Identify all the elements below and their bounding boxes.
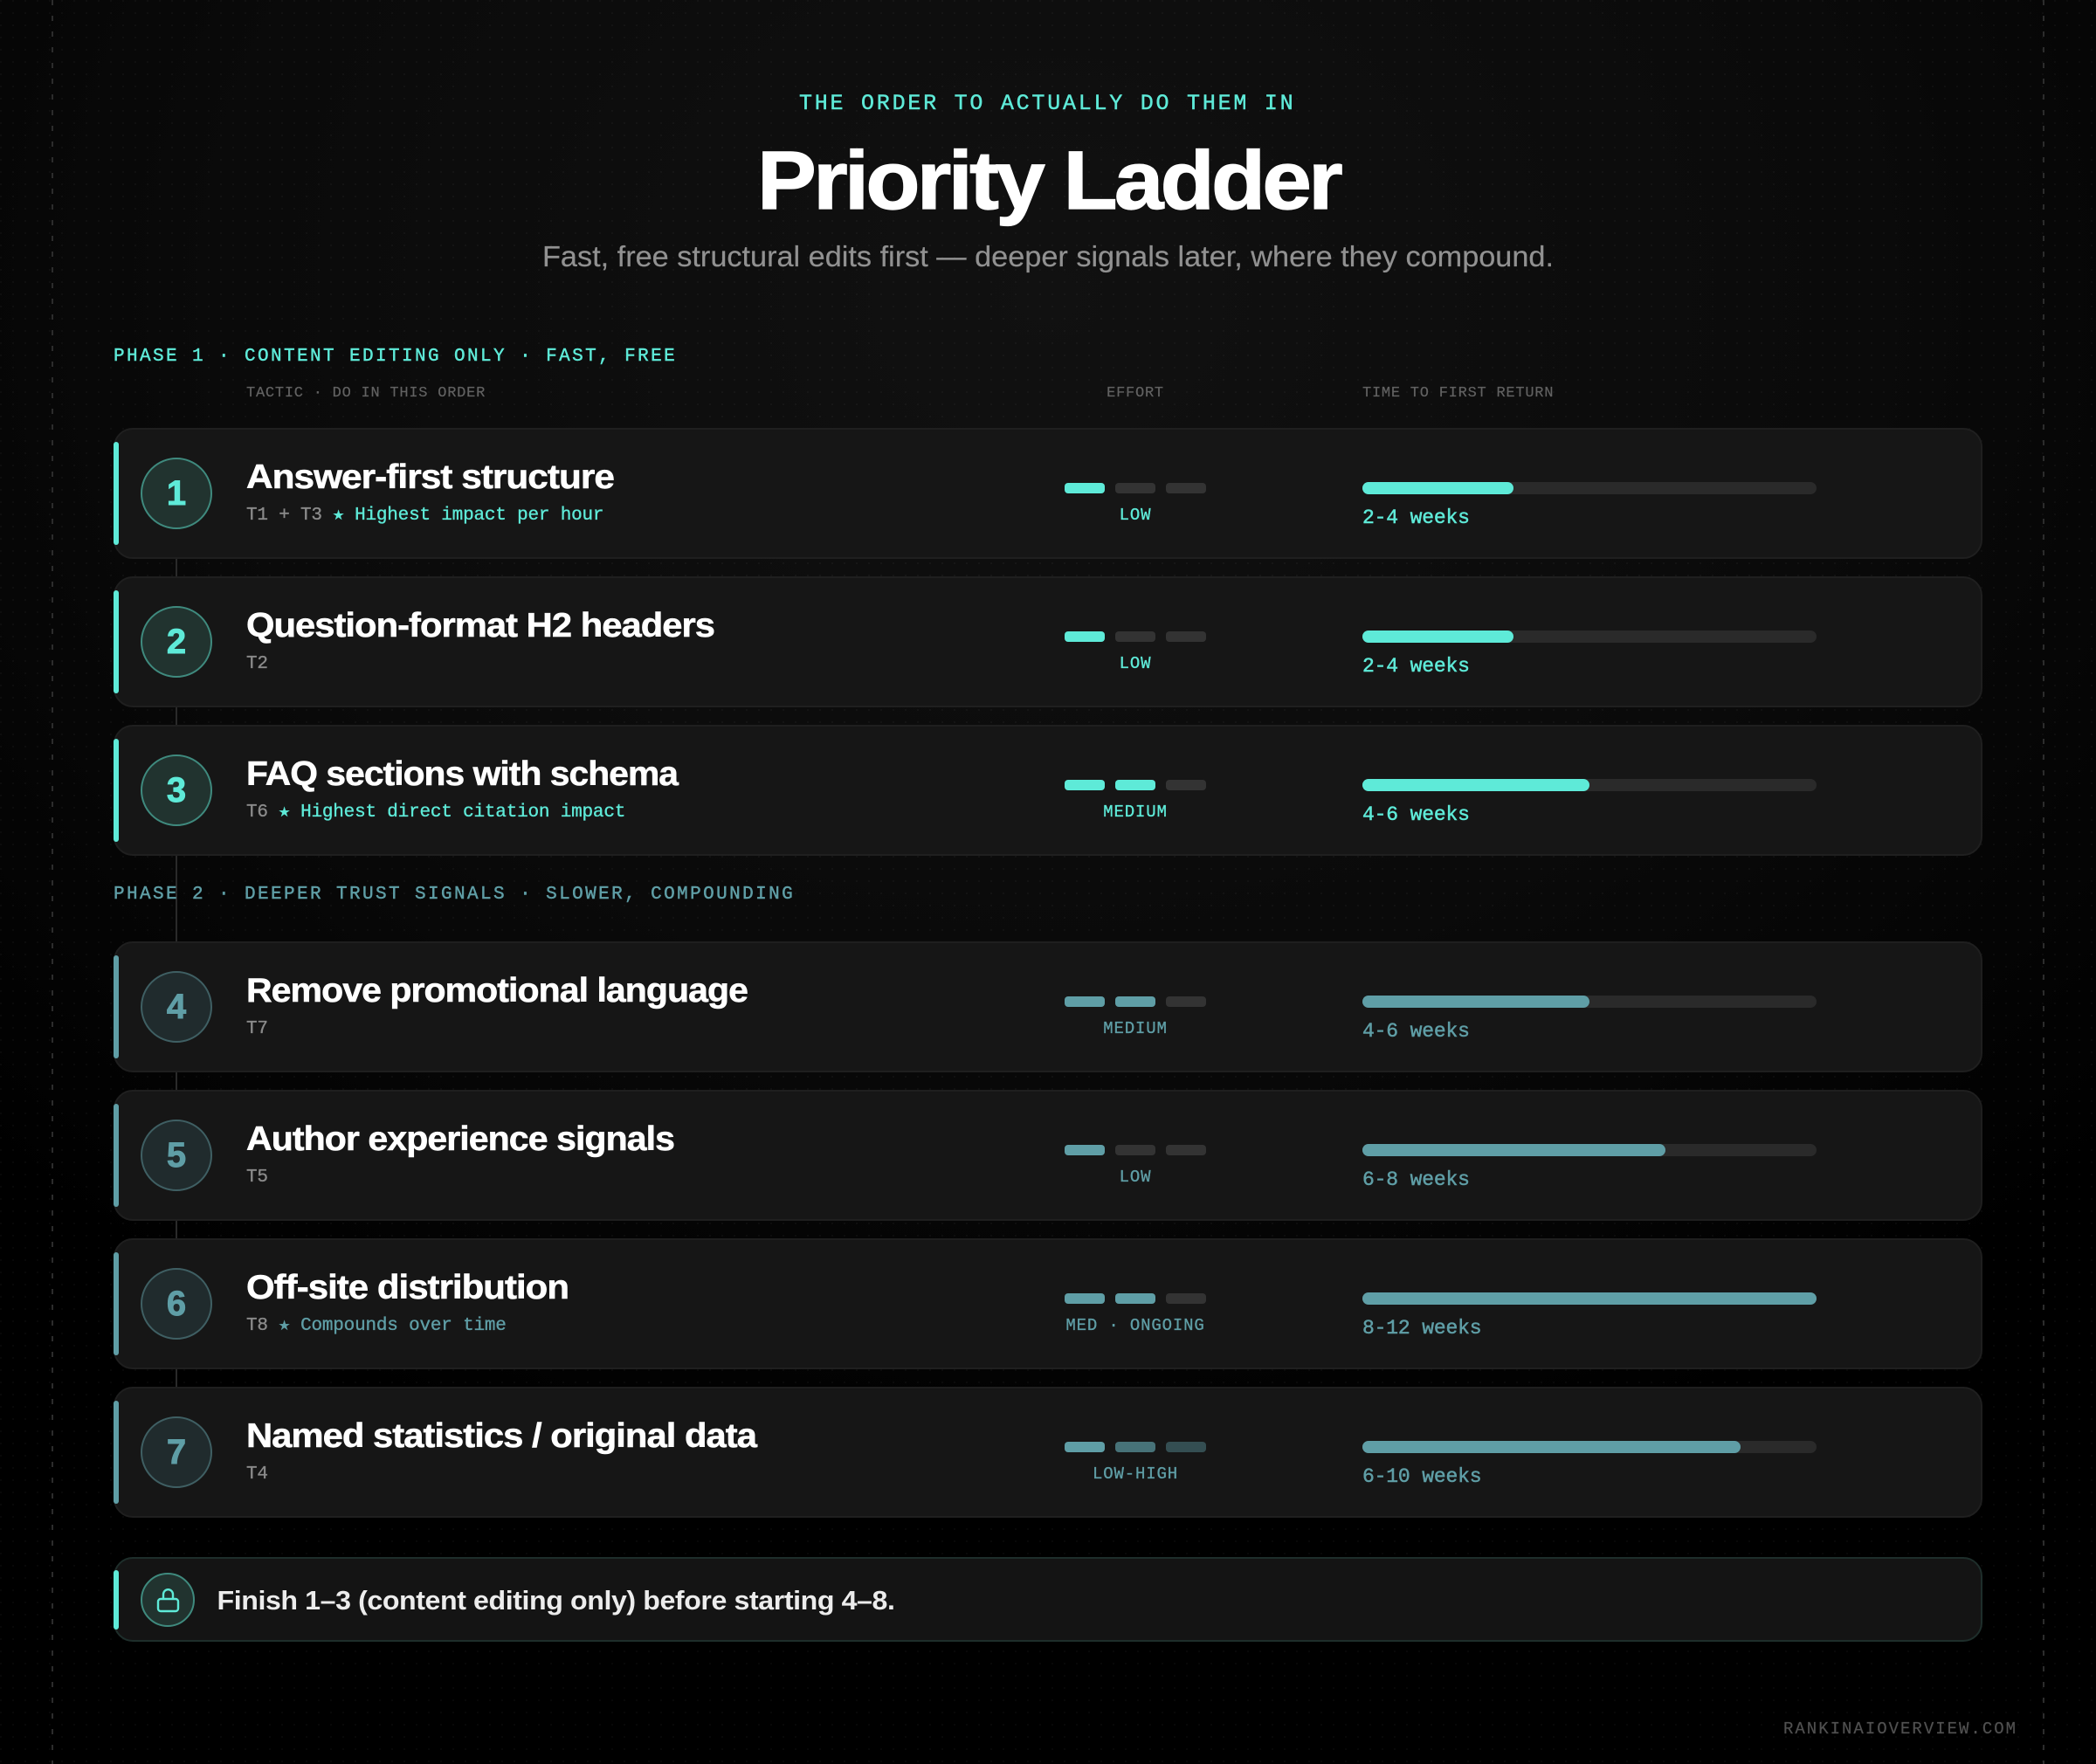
tactic name: Author experience signals (246, 1120, 674, 1158)
tactic note: T5 (246, 1168, 268, 1188)
callout text: Finish 1–3 (content editing only) before starting 4–8. (217, 1585, 894, 1616)
time bar (1362, 1292, 1817, 1340)
number badge 7 (141, 1417, 211, 1487)
time bar: 6-10 weeks (1362, 1465, 1481, 1488)
number badge 1: 1 (167, 474, 186, 513)
time bar (1362, 1441, 1817, 1488)
effort meter: LOW (1120, 1168, 1151, 1187)
ladder connector line (176, 559, 177, 1387)
number badge 6 (141, 1269, 211, 1339)
title: Priority Ladder (757, 134, 1342, 227)
time bar: 4-6 weeks (1362, 1020, 1470, 1043)
row 5: Author experience signals (114, 1091, 1982, 1220)
effort meter (1065, 631, 1206, 673)
time bar: 2-4 weeks (1362, 655, 1470, 678)
tactic note: T2 (246, 654, 268, 674)
tactic note: T7 (246, 1019, 268, 1039)
effort meter (1065, 483, 1206, 525)
column header: time to first return: TIME TO FIRST RETURN (1362, 385, 1554, 402)
row 6: Off-site distribution (114, 1239, 1982, 1368)
row 1: Answer-first structure (114, 429, 1982, 558)
time bar: 6-8 weeks (1362, 1168, 1470, 1191)
eyebrow: THE ORDER TO ACTUALLY DO THEM IN (799, 91, 1295, 116)
number badge 5: 5 (167, 1136, 186, 1175)
number badge 3: 3 (167, 771, 186, 810)
effort meter (1065, 780, 1206, 822)
column header: effort: EFFORT (1107, 385, 1164, 402)
time bar (1362, 1144, 1817, 1191)
number badge 2: 2 (167, 623, 186, 661)
effort meter: LOW-HIGH (1093, 1464, 1178, 1484)
time bar (1362, 996, 1817, 1043)
time bar (1362, 482, 1817, 529)
phase 1 heading: PHASE 1 · CONTENT EDITING ONLY · FAST, FREE (114, 347, 677, 367)
number badge 4 (141, 972, 211, 1042)
callout: finish first (114, 1558, 1982, 1641)
row 7: Named statistics / original data (114, 1388, 1982, 1517)
tactic name: FAQ sections with schema (246, 755, 679, 793)
time bar: 8-12 weeks (1362, 1317, 1481, 1340)
time bar: 2-4 weeks (1362, 506, 1470, 529)
effort meter (1065, 996, 1206, 1038)
effort meter: MEDIUM (1103, 1019, 1168, 1038)
tactic name: Remove promotional language (246, 972, 748, 1009)
row 4: Remove promotional language (114, 942, 1982, 1071)
number badge 3 (141, 755, 211, 825)
time bar (1362, 630, 1817, 678)
number badge 5 (141, 1120, 211, 1190)
effort meter: LOW (1120, 506, 1151, 525)
number badge 7: 7 (167, 1433, 186, 1471)
effort meter (1065, 1145, 1206, 1187)
time bar: 4-6 weeks (1362, 803, 1470, 826)
footer credit: RANKINAIOVERVIEW.COM (1783, 1719, 2017, 1739)
number badge 2 (141, 607, 211, 677)
effort meter (1065, 1293, 1206, 1335)
time bar (1362, 779, 1817, 826)
number badge 1 (141, 458, 211, 528)
tactic note: T4 (246, 1464, 268, 1485)
tactic note: T1 + T3 ★ Highest impact per hour (246, 506, 603, 526)
effort meter: LOW (1120, 654, 1151, 673)
effort meter: MED · ONGOING (1065, 1316, 1205, 1335)
tactic note: T8 ★ Compounds over time (246, 1316, 507, 1336)
column header: tactic: TACTIC · DO IN THIS ORDER (246, 385, 486, 402)
effort meter (1065, 1442, 1206, 1484)
number badge 6: 6 (167, 1285, 186, 1323)
tactic name: Question-format H2 headers (246, 607, 714, 644)
tactic name: Named statistics / original data (246, 1417, 757, 1455)
subtitle: Fast, free structural edits first — deeper signals later, where they compound. (542, 240, 1554, 272)
row 2: Question-format H2 headers (114, 577, 1982, 706)
tactic note: T6 ★ Highest direct citation impact (246, 803, 625, 823)
icon: lock (141, 1574, 194, 1626)
phase 2 heading: PHASE 2 · DEEPER TRUST SIGNALS · SLOWER, COMPOUNDING (114, 885, 795, 905)
number badge 4: 4 (167, 988, 187, 1026)
tactic name: Answer-first structure (246, 458, 614, 496)
effort meter: MEDIUM (1103, 803, 1168, 822)
tactic name: Off-site distribution (246, 1269, 569, 1306)
row 3: FAQ sections with schema (114, 726, 1982, 855)
